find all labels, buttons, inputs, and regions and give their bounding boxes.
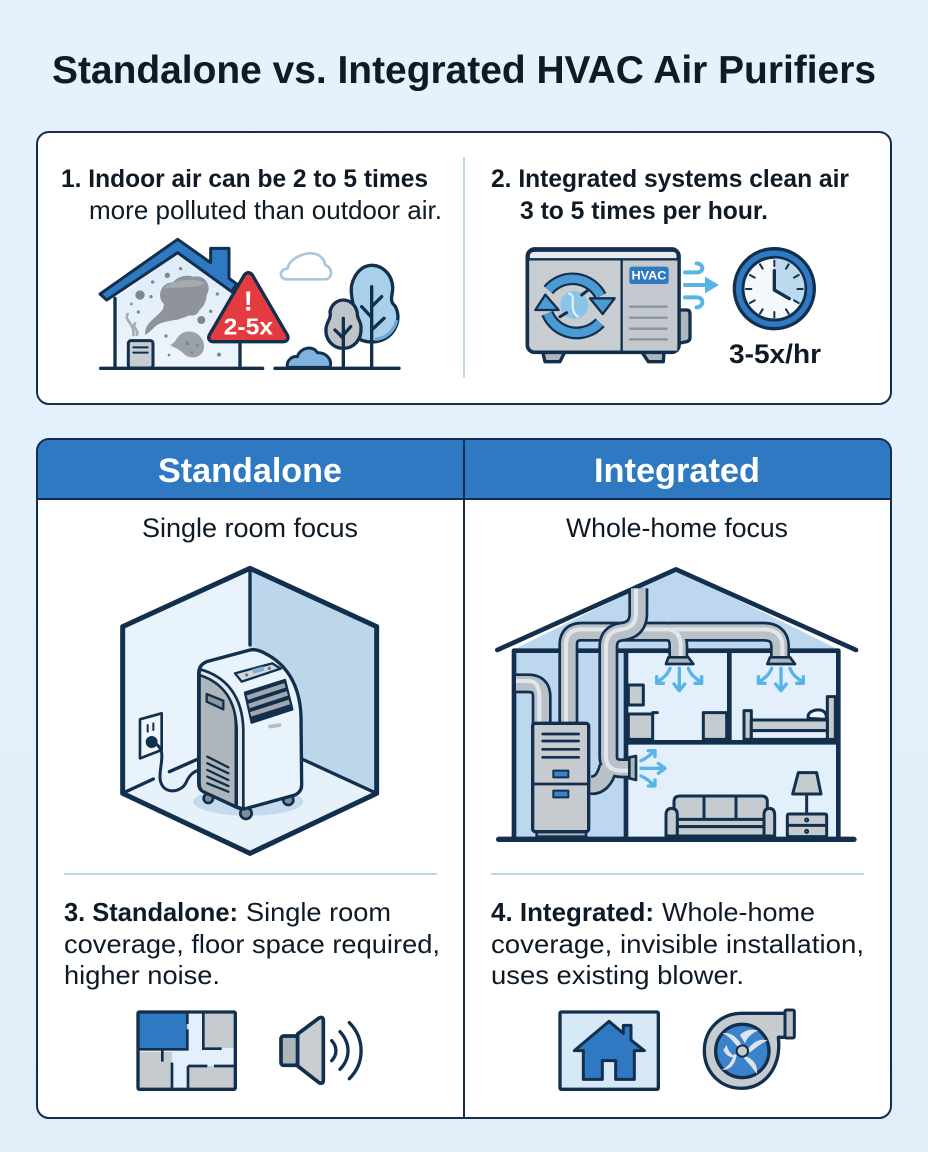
header: Integrated bbox=[464, 440, 890, 499]
circular recycle arrows bbox=[535, 279, 615, 333]
registers bbox=[629, 657, 795, 780]
text: fact 3: higher noise. bbox=[64, 960, 220, 990]
text: fact 2: 2. Integrated systems clean air bbox=[491, 165, 849, 193]
text: fact 1: 1. Indoor air can be 2 to 5 times bbox=[61, 165, 428, 193]
icon: whole house bbox=[560, 1012, 658, 1089]
ducts bbox=[516, 588, 782, 785]
icon: polluted house with warning and trees: ! bbox=[244, 286, 253, 317]
icon: HVAC unit with airflow bbox=[527, 249, 814, 362]
panel: comparison table bbox=[37, 439, 891, 1118]
header: Integrated: Integrated bbox=[594, 452, 760, 490]
text: fact 3: Single room bbox=[246, 897, 391, 927]
label: cleaning rate: 3-5x/hr bbox=[729, 339, 822, 369]
text: fact 4: 4. Integrated: bbox=[491, 897, 654, 927]
smoke cloud bbox=[145, 276, 209, 335]
title: Standalone vs. Integrated HVAC Air Purifiers bbox=[52, 49, 876, 92]
text: fact 3: coverage, floor space required, bbox=[64, 929, 440, 959]
furniture: bed bbox=[744, 697, 835, 739]
subheading: whole home: Whole-home focus bbox=[566, 513, 788, 543]
icon: speaker with sound waves bbox=[281, 1017, 361, 1083]
text: fact 2 bbox=[491, 165, 849, 225]
icon: HVAC unit with airflow: HVAC bbox=[631, 269, 667, 283]
text: fact 4: coverage, invisible installation, bbox=[491, 929, 864, 959]
text: fact 2: 3 to 5 times per hour. bbox=[520, 197, 768, 225]
text: fact 3: 3. Standalone: bbox=[64, 897, 238, 927]
furniture: lamp and nightstand bbox=[787, 773, 827, 837]
text: fact 3 bbox=[64, 897, 440, 990]
text: fact 4 bbox=[491, 897, 864, 990]
illustration: whole-home HVAC ductwork bbox=[497, 569, 856, 839]
icon: floor plan bbox=[138, 1012, 235, 1089]
icon: polluted house with warning and trees bbox=[100, 239, 399, 368]
furnace bbox=[533, 723, 589, 837]
furniture: sofa bbox=[666, 796, 775, 836]
icon: blower fan bbox=[704, 1010, 794, 1088]
icon: polluted house with warning and trees: 2-5x bbox=[224, 314, 273, 340]
illustration: standalone unit in a room bbox=[123, 568, 377, 853]
text: fact 1: more polluted than outdoor air. bbox=[89, 195, 442, 225]
subheading: single room: Single room focus bbox=[142, 513, 358, 543]
text: fact 4: uses existing blower. bbox=[491, 960, 744, 990]
furniture: office bbox=[628, 685, 727, 739]
header: Standalone bbox=[38, 440, 464, 499]
text: fact 1 bbox=[61, 165, 442, 225]
text: fact 4: Whole-home bbox=[662, 897, 815, 927]
panel: statistics bbox=[37, 132, 891, 404]
header: Standalone: Standalone bbox=[158, 452, 342, 490]
airflow arrows bbox=[641, 668, 803, 786]
